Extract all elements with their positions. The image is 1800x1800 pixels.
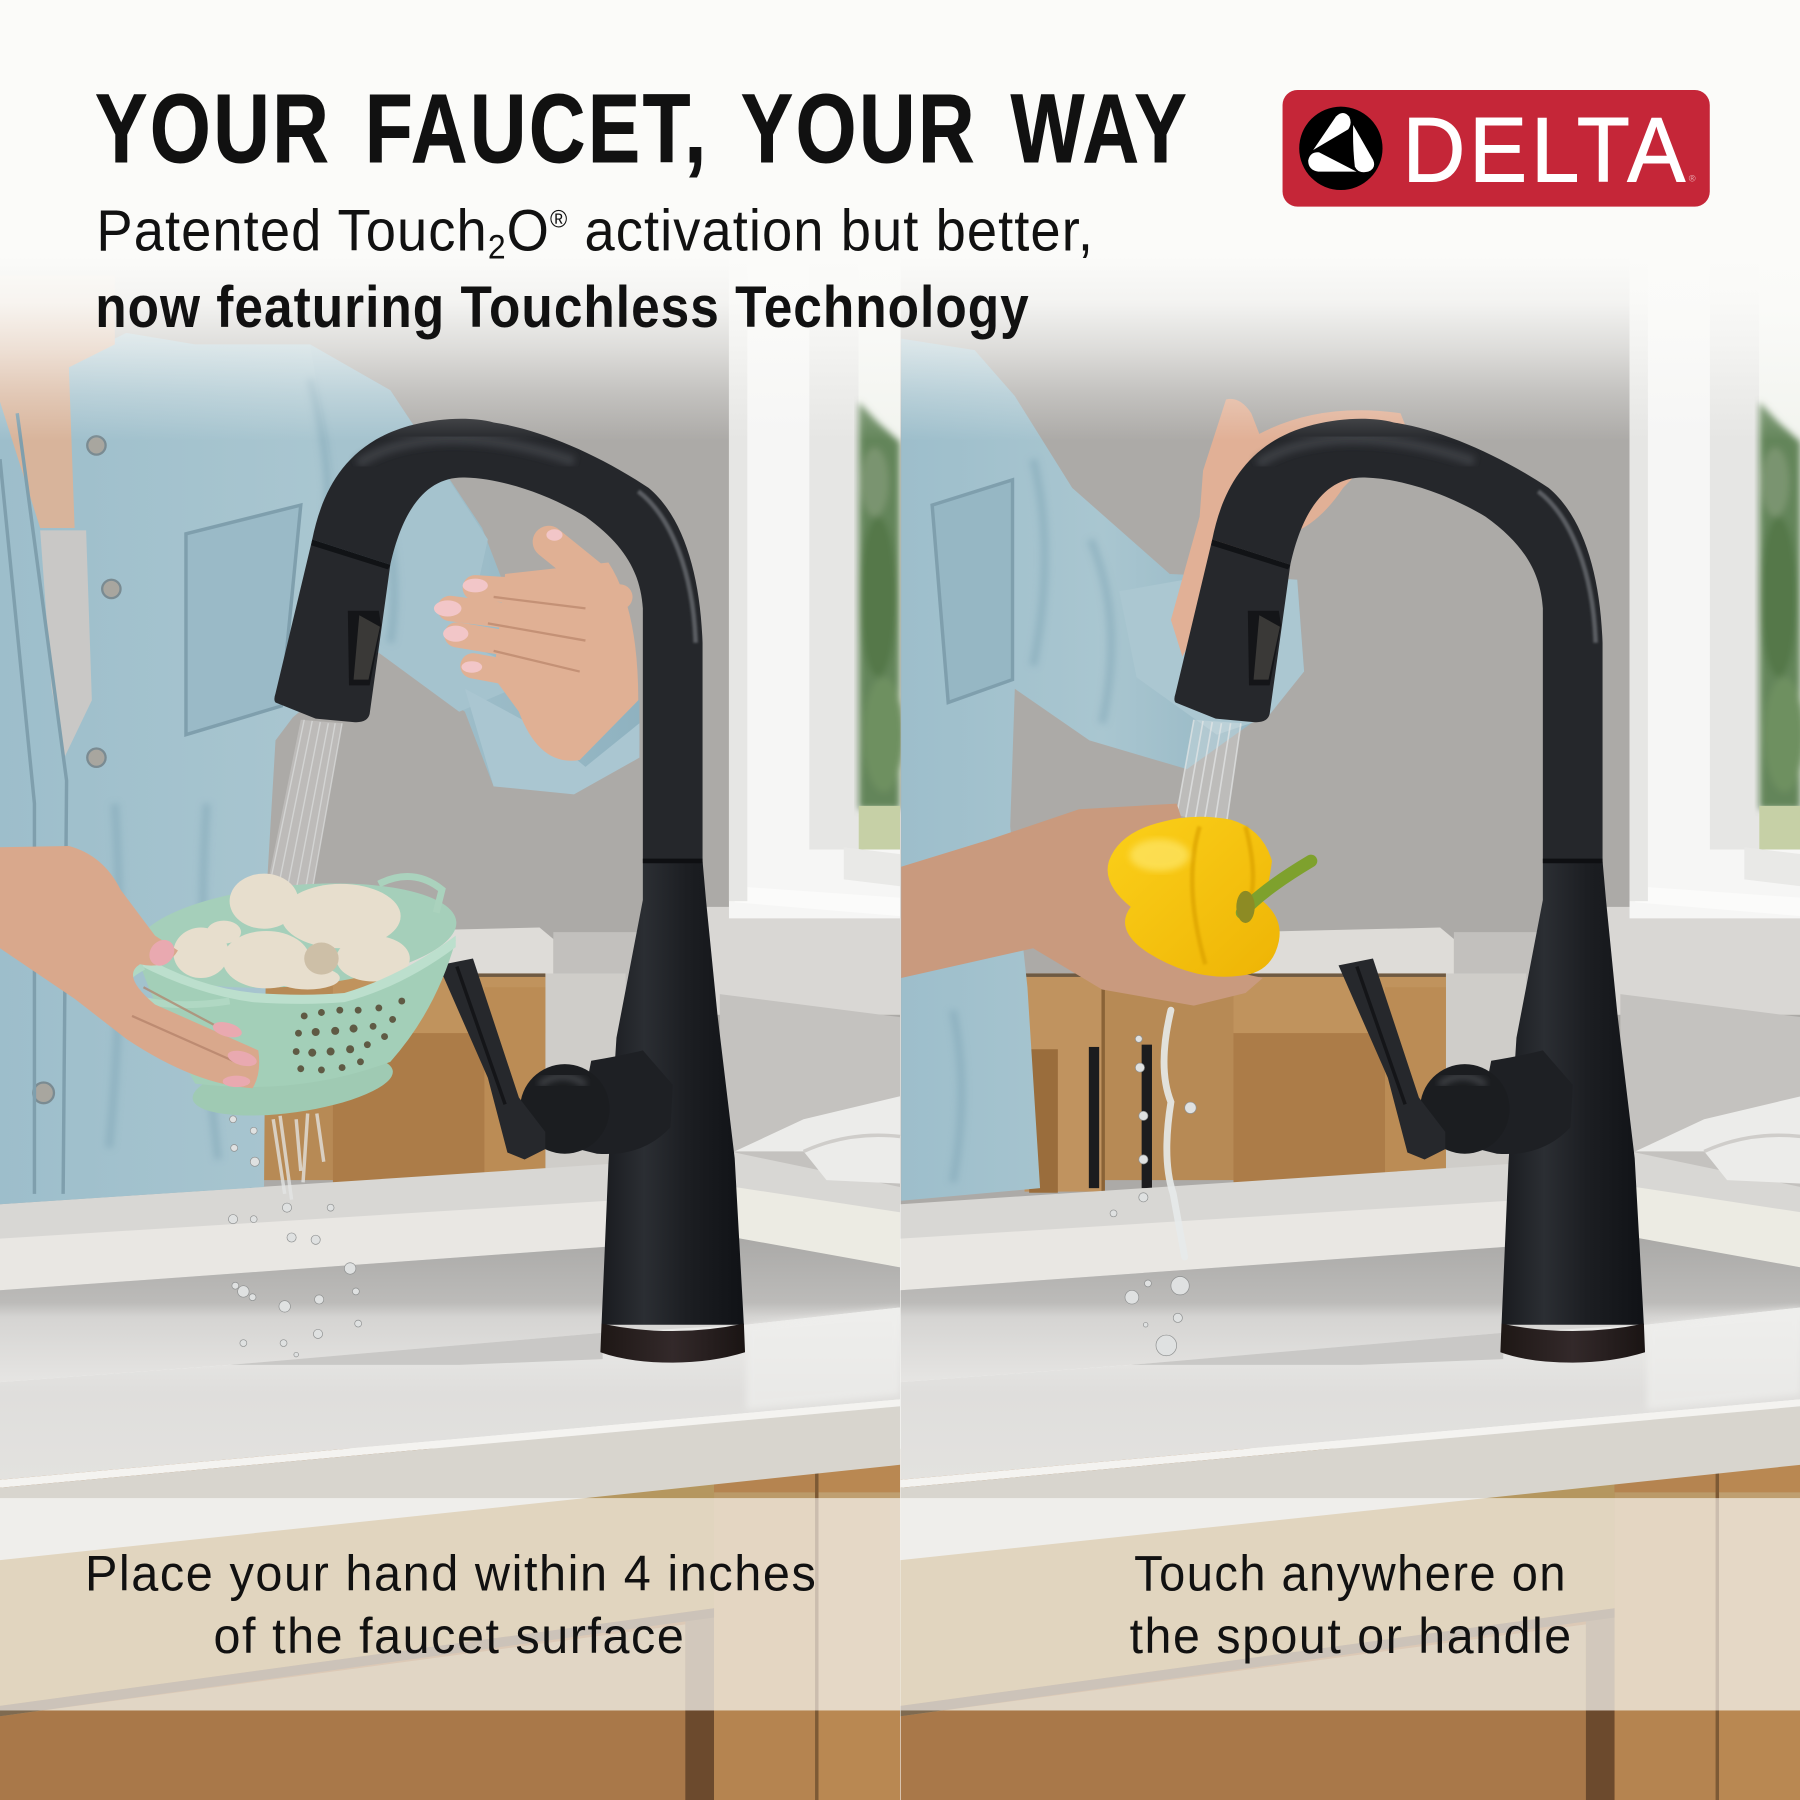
- water stream and droplets: right: [1110, 1010, 1196, 1356]
- hand: right, holding pepper: [901, 804, 1263, 1006]
- yellow bell pepper: [1108, 817, 1311, 977]
- bowl: [138, 940, 456, 1087]
- caption: left: [85, 1545, 817, 1664]
- subtitle line two: now featuring Touchless Technology: [95, 275, 1030, 340]
- fade into scene: [0, 257, 1800, 441]
- subtitle line one: 2: [488, 228, 507, 266]
- neck skin and undershirt: [0, 276, 115, 528]
- title: YOUR FAUCET, YOUR WAY: [95, 74, 1189, 183]
- panel: right kitchen scene: [901, 230, 1800, 1800]
- chest pocket: [932, 480, 1012, 703]
- faucet: left: [274, 419, 745, 1363]
- colander with mushrooms: [124, 871, 461, 1126]
- hand: left, hovering near spout: [434, 529, 638, 761]
- triangle mark: [1299, 107, 1383, 190]
- caption: right: [1130, 1545, 1573, 1664]
- registered mark: ®: [1689, 174, 1696, 184]
- caption line two: of the faucet surface: [214, 1608, 685, 1664]
- left handle: [124, 967, 230, 1005]
- faucet: right: [1174, 419, 1645, 1363]
- caption line one: Touch anywhere on: [1134, 1545, 1567, 1601]
- panel: left kitchen scene: [0, 230, 905, 1800]
- shirt body: [0, 333, 639, 1204]
- person: right, denim shirt: [901, 339, 1304, 1201]
- pepper highlight: [1130, 839, 1189, 871]
- caption line two: the spout or handle: [1130, 1608, 1573, 1664]
- fingernails: [434, 529, 562, 673]
- colander foot: [189, 1043, 397, 1126]
- shirt body: [901, 339, 1304, 1201]
- shirt folds: [109, 379, 394, 1159]
- subtitle line one: Patented Touch: [96, 198, 518, 263]
- top white fade: [0, 0, 1800, 258]
- buttons: [33, 436, 121, 1103]
- sleeve fold: [310, 344, 540, 712]
- subtitle: [95, 198, 1094, 340]
- colander holes: [293, 998, 405, 1073]
- cuff: [465, 689, 639, 794]
- subtitle line one: activation but better,: [568, 198, 1094, 263]
- water droplets: left: [228, 1114, 362, 1357]
- pepper creases: [1192, 827, 1253, 964]
- caption line one: Place your hand within 4 inches: [85, 1545, 817, 1601]
- pepper stem: [1242, 861, 1311, 913]
- hand: right, touching spout: [1171, 399, 1405, 657]
- mushrooms: [173, 874, 410, 990]
- water spray: left: [266, 720, 342, 890]
- water spray: right: [1177, 720, 1241, 827]
- subtitle line one: ®: [550, 205, 568, 233]
- wordmark: DELTA: [1403, 100, 1689, 202]
- Delta logo: [1283, 90, 1710, 207]
- back rim: [132, 871, 461, 1000]
- cuff: [1119, 574, 1304, 735]
- hand: left, holding colander: [0, 846, 259, 1088]
- person: left, denim shirt: [0, 276, 639, 1204]
- shirt folds: [953, 459, 1111, 1182]
- subtitle line one: O: [507, 198, 550, 263]
- placket stitching: [0, 413, 67, 1194]
- red badge: [1283, 90, 1710, 207]
- fingernails: [144, 935, 258, 1087]
- chest pocket: [186, 505, 301, 735]
